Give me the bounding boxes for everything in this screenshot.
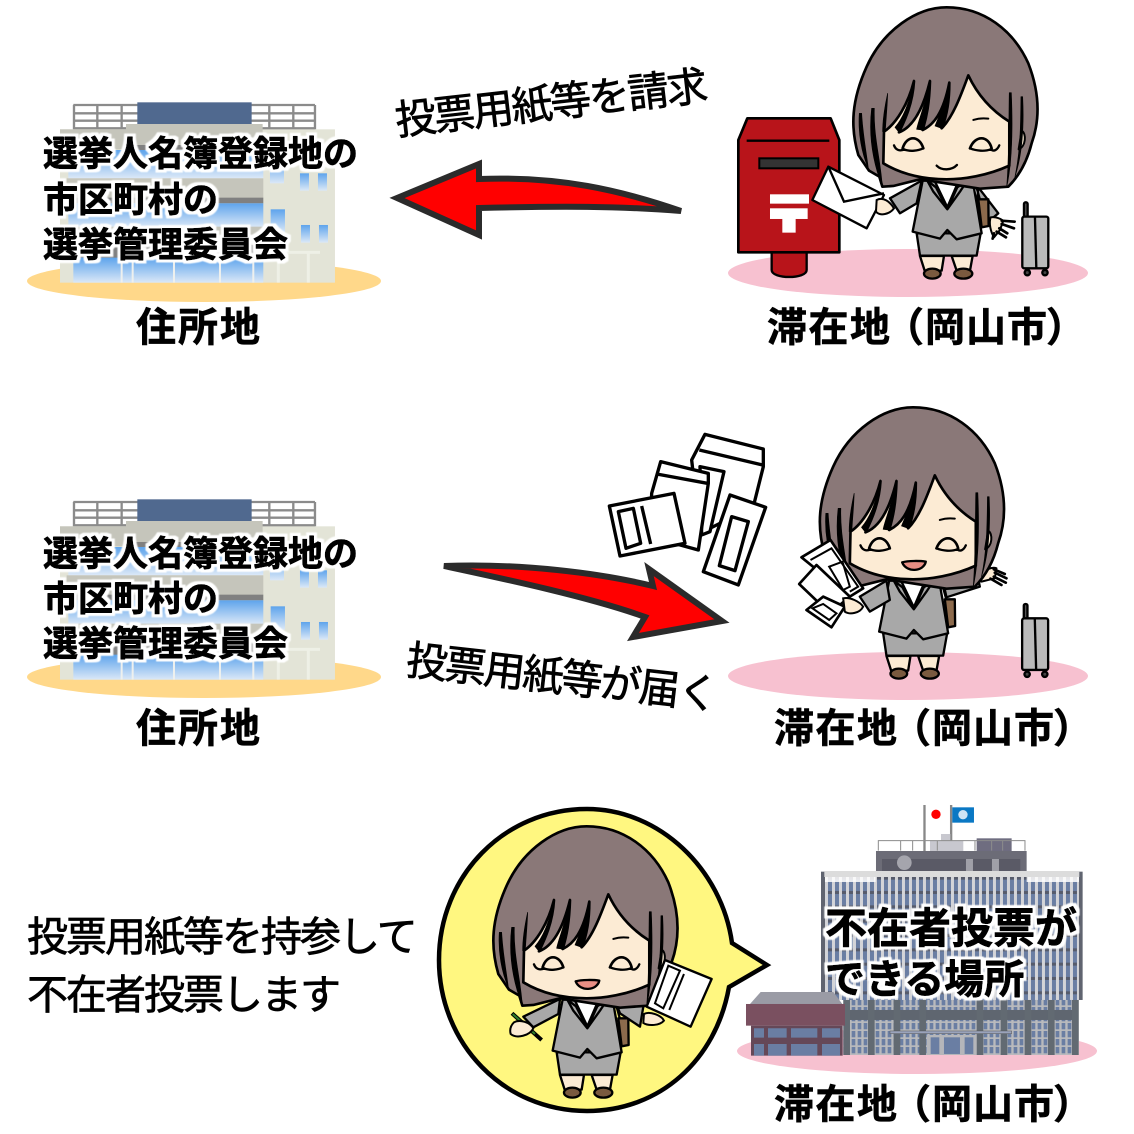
label on building: 市区町村の: [43, 580, 218, 619]
caption: stay location: 岡山市: [925, 306, 1048, 350]
caption: stay location: （: [884, 306, 924, 350]
ground: pink ellipse: [737, 1028, 1097, 1074]
arrow: left red: [397, 164, 681, 235]
icon: stack of envelopes: [609, 434, 766, 585]
panel: step 2 delivery: [27, 407, 1093, 751]
label on building: 不在者投票が: [825, 905, 1077, 952]
label on building: 選挙人名簿登録地の: [43, 135, 358, 174]
caption: stay location: ）: [1053, 1083, 1093, 1127]
caption: stay location: ）: [1046, 306, 1086, 350]
label on building: 市区町村の: [43, 181, 218, 220]
caption: stay location: ）: [1053, 707, 1093, 751]
label on building: 選挙管理委員会: [43, 226, 288, 265]
panel: step 1 request: [27, 7, 1088, 350]
caption: stay location: （: [891, 1083, 931, 1127]
speech bubble: [439, 809, 767, 1111]
building: home municipality office: [60, 102, 335, 283]
caption: stay location: 岡山市: [932, 707, 1055, 751]
building: home municipality office: [60, 499, 335, 680]
flags: [923, 805, 974, 852]
instruction text: 不在者投票します: [27, 972, 339, 1018]
caption: stay location: 岡山市: [932, 1083, 1055, 1127]
arrow: right red: [444, 565, 722, 637]
ground: pink ellipse: [728, 652, 1088, 700]
woman handing envelope: [812, 7, 1048, 279]
caption: home address: 住所地: [136, 707, 262, 751]
instruction text: 投票用紙等を持参して: [27, 914, 416, 960]
annex: [746, 992, 845, 1056]
label on building: 選挙人名簿登録地の: [43, 535, 358, 574]
caption: stay location: 滞在地: [774, 707, 898, 751]
caption: stay location: 滞在地: [774, 1083, 898, 1127]
arrow label: 投票用紙等を請求: [393, 63, 709, 144]
caption: home address: 住所地: [136, 306, 262, 350]
icon: red post box: [738, 118, 839, 277]
woman waving and holding mail: [799, 407, 1048, 679]
arrow label: 投票用紙等が届く: [404, 637, 719, 718]
label on building: 選挙管理委員会: [43, 625, 288, 664]
label on building: できる場所: [825, 958, 1024, 1002]
ground: orange ellipse: [27, 260, 381, 302]
caption: stay location: （: [891, 707, 931, 751]
caption: stay location: 滞在地: [767, 306, 892, 350]
building: Okayama city hall: [746, 805, 1083, 1056]
ground: orange ellipse: [27, 656, 381, 698]
panel: step 3 voting: [27, 805, 1097, 1127]
woman with ballot and pen: [493, 826, 712, 1098]
ground: pink ellipse: [728, 249, 1088, 297]
